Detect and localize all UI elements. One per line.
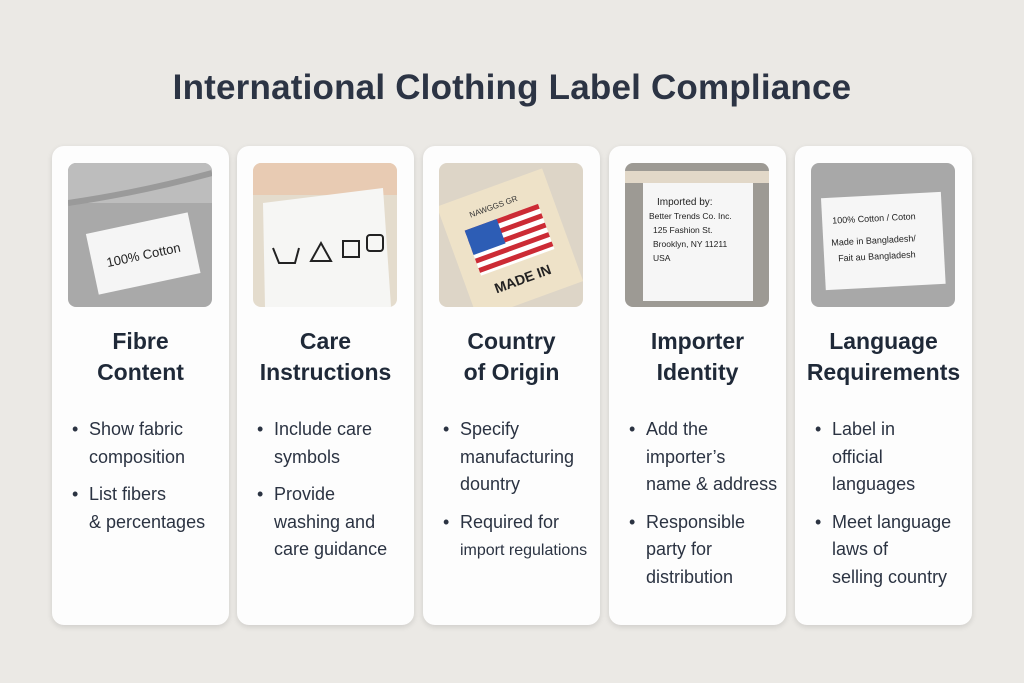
- bullets: party for: [646, 539, 712, 559]
- image: importer label: Brooklyn, NY 11211: [653, 239, 727, 249]
- bullets: care guidance: [274, 539, 387, 559]
- bullets: laws of: [832, 539, 888, 559]
- image: made in USA label: MADE IN: [492, 261, 553, 296]
- bullets: import regulations: [460, 542, 587, 559]
- image: importer label: USA: [653, 253, 671, 263]
- image: bilingual label: 100% Cotton / Coton: [832, 211, 916, 226]
- heading: Care: [300, 328, 351, 354]
- heading: Instructions: [260, 359, 391, 385]
- panel: fibre content: [52, 146, 229, 625]
- bullets: List fibers: [89, 484, 166, 504]
- bullets: dountry: [460, 474, 520, 494]
- bullets: Show fabric: [89, 419, 183, 439]
- bullets: languages: [832, 474, 915, 494]
- bullets: [72, 419, 205, 532]
- bullets: Include care: [274, 419, 372, 439]
- heading: Identity: [657, 359, 738, 385]
- image: importer label: 125 Fashion St.: [653, 225, 713, 235]
- bullets: symbols: [274, 446, 340, 466]
- bullets: manufacturing: [460, 446, 574, 466]
- heading: Importer: [651, 328, 744, 354]
- heading: Country: [467, 328, 556, 354]
- heading: Content: [97, 359, 184, 385]
- heading: [651, 328, 744, 385]
- image: made in USA label: NAWGGS GR: [468, 194, 519, 220]
- bullets: [630, 419, 777, 586]
- image: importer label: Better Trends Co. Inc.: [649, 211, 732, 221]
- heading: [464, 328, 559, 385]
- image: made in USA label: [439, 163, 583, 307]
- heading: Requirements: [807, 359, 960, 385]
- image: bilingual label: [811, 163, 955, 307]
- image: cotton label: [68, 163, 212, 307]
- bullets: importer’s: [646, 446, 725, 466]
- heading: Language: [829, 328, 938, 354]
- heading: [260, 328, 391, 385]
- bullets: washing and: [274, 512, 375, 532]
- image: bilingual label: Made in Bangladesh/: [831, 233, 917, 248]
- bullets: [444, 419, 587, 559]
- image: care symbols label: [253, 163, 397, 307]
- bullets: selling country: [832, 566, 947, 586]
- bullets: Responsible: [646, 512, 745, 532]
- bullets: official: [832, 446, 883, 466]
- heading: [807, 328, 960, 385]
- heading: Fibre: [112, 328, 169, 354]
- bullets: Add the: [646, 419, 708, 439]
- bullets: [258, 419, 387, 559]
- bullets: [816, 419, 951, 587]
- panel: importer identity: [609, 146, 786, 625]
- bullets: & percentages: [89, 512, 205, 532]
- bullets: Specify: [460, 419, 519, 439]
- bullets: Label in: [832, 419, 895, 439]
- bullets: distribution: [646, 566, 733, 586]
- bullets: Required for: [460, 512, 559, 532]
- bullets: Meet language: [832, 512, 951, 532]
- title: International Clothing Label Compliance: [173, 68, 851, 107]
- panel: care instructions: [237, 146, 414, 625]
- bullets: composition: [89, 446, 185, 466]
- bullets: name & address: [646, 474, 777, 494]
- image: bilingual label: Fait au Bangladesh: [838, 249, 916, 263]
- heading: of Origin: [464, 359, 559, 385]
- panel: language requirements: [795, 146, 972, 625]
- heading: [97, 328, 184, 385]
- image: importer label: Imported by:: [657, 197, 713, 208]
- bullets: Provide: [274, 484, 335, 504]
- image: importer label: [625, 163, 769, 307]
- image: cotton label: 100% Cotton: [105, 240, 182, 270]
- panel: country of origin: [423, 146, 600, 625]
